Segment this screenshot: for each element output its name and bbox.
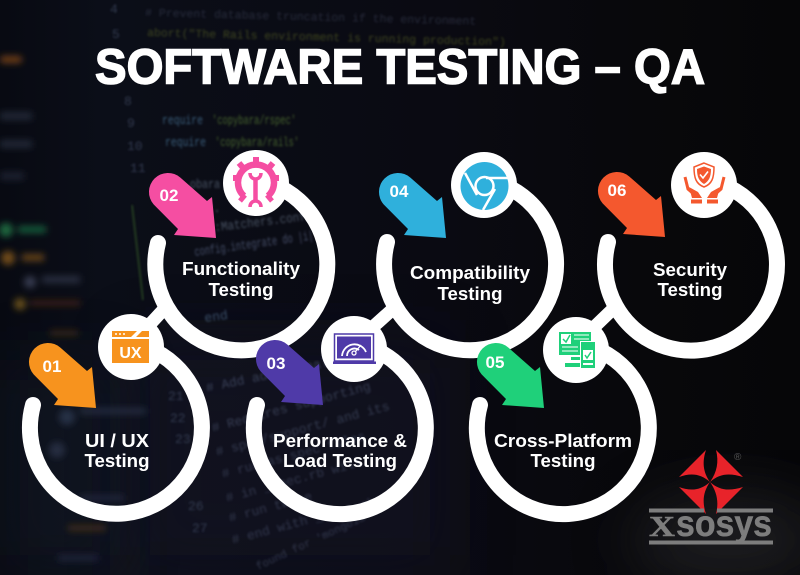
label 06: Security xyxy=(653,259,728,280)
background: blurred code screen: 10 xyxy=(127,139,143,154)
background: blurred code screen: config.integrate do |i| xyxy=(193,228,314,260)
number 05: 05 xyxy=(486,353,504,372)
step 05: cross-platform testing xyxy=(477,308,649,514)
label 03: Load Testing xyxy=(283,450,397,471)
number 01: 01 xyxy=(43,357,61,376)
logo wordmark: X xyxy=(649,511,675,543)
icon circle 06 xyxy=(671,152,737,218)
label 05: Testing xyxy=(530,450,596,471)
background: blurred code screen: 4 xyxy=(110,2,118,17)
label 06 xyxy=(653,259,728,300)
arrow 03 xyxy=(256,340,323,405)
background: blurred code screen: found for 'mongoid' xyxy=(255,510,373,574)
ring 04 xyxy=(384,184,556,350)
background: blurred code screen: # Prevent database truncation if the environment xyxy=(145,7,476,29)
connector 05 xyxy=(586,308,614,335)
background: blurred code screen: 11 xyxy=(130,161,146,176)
label 04 xyxy=(410,262,531,304)
number 03: 03 xyxy=(267,354,285,373)
step 03: performance and load testing xyxy=(254,308,426,514)
background: blurred code screen: a::Matchers.config xyxy=(201,208,320,237)
label 03 xyxy=(273,430,407,471)
background: blurred code screen: # Add additional xyxy=(205,355,330,396)
background: blurred code screen: 8 xyxy=(124,94,132,109)
registered mark: ® xyxy=(734,452,742,463)
number 02: 02 xyxy=(160,186,178,205)
label 02: Testing xyxy=(208,279,274,300)
background: blurred code screen: 26 xyxy=(188,499,204,514)
logo wordmark: sosys xyxy=(676,503,772,544)
icon circle 05 xyxy=(543,317,609,383)
background: blurred code screen: # in _spec.rb will xyxy=(224,455,364,506)
title: SOFTWARE TESTING – QA xyxy=(95,40,705,94)
background: blurred code screen: # spec/support/ and its xyxy=(214,399,391,460)
icon: devices xyxy=(559,332,596,368)
background: blurred code screen: obara xyxy=(190,177,220,192)
icon circle 02 xyxy=(223,150,289,216)
background: blurred code screen: 5 xyxy=(112,27,120,42)
background: blurred code screen: 'copybara/rails' xyxy=(215,135,299,150)
icon: ux window xyxy=(112,331,149,363)
icon: ux window: UX xyxy=(119,345,142,362)
number 04: 04 xyxy=(390,182,409,201)
logo: xsosys xyxy=(649,450,773,544)
label 01: UI / UX xyxy=(85,430,150,451)
arrow 05 xyxy=(477,343,544,408)
arrow 01 xyxy=(29,343,96,408)
icon: laptop gauge xyxy=(333,334,376,364)
arrow 04 xyxy=(379,173,446,238)
step 04: compatibility testing xyxy=(379,152,556,350)
step 02: functionality testing xyxy=(149,150,327,350)
label 05: Cross-Platform xyxy=(494,430,632,451)
label 01: Testing xyxy=(84,450,150,471)
background: blurred code screen: 'copybara/rspec' xyxy=(212,113,296,128)
background: blurred code screen: # run twice xyxy=(227,489,314,526)
label 02 xyxy=(182,258,301,300)
label 02: Functionality xyxy=(182,258,301,279)
icon: shield in hands xyxy=(685,163,724,204)
arrow 06 xyxy=(598,172,665,237)
ring 02 xyxy=(155,184,327,350)
background: blurred code screen: 9 xyxy=(127,116,135,131)
background: blurred code screen: # run as spec files xyxy=(220,429,367,482)
icon circle 03 xyxy=(321,316,387,382)
arrow 02 xyxy=(149,173,216,238)
label 01 xyxy=(84,430,150,471)
logo mark xyxy=(679,450,743,514)
icon: browser logo xyxy=(460,162,508,210)
number 06: 06 xyxy=(608,181,626,200)
step 01: ui ux testing xyxy=(29,308,202,514)
icon circle 01 xyxy=(98,314,164,380)
label 06: Testing xyxy=(658,279,722,300)
label 04: Testing xyxy=(438,283,502,304)
ring 05 xyxy=(477,348,649,514)
background: blurred code screen: 23 xyxy=(175,432,191,447)
icon circle 04 xyxy=(451,152,517,218)
label 03: Performance & xyxy=(273,430,407,451)
background: blurred code screen: abort("The Rails environment is running production") xyxy=(147,27,506,49)
ring 03 xyxy=(254,348,426,514)
connector 03 xyxy=(364,308,394,335)
background: blurred code screen: require xyxy=(162,113,203,128)
connector 01 xyxy=(140,308,165,335)
background: blurred code screen: 22 xyxy=(170,411,186,426)
logo bars xyxy=(649,508,773,544)
label 04: Compatibility xyxy=(410,262,531,283)
background: blurred code screen: ry. xyxy=(197,201,221,216)
ring 01 xyxy=(30,348,202,514)
icon: gear and wrench xyxy=(233,157,279,207)
background: blurred code screen: 27 xyxy=(192,521,208,536)
background: blurred code screen: require xyxy=(165,135,206,150)
ring 06 xyxy=(605,184,777,351)
step 06: security testing xyxy=(598,152,777,351)
background: blurred code screen: # Requires supporting xyxy=(210,379,372,436)
background: blurred code screen: 21 xyxy=(168,389,184,404)
background: blurred code screen: end xyxy=(203,308,229,326)
background: blurred code screen: # end with _spec.rb xyxy=(230,495,377,548)
label 05 xyxy=(494,430,632,471)
